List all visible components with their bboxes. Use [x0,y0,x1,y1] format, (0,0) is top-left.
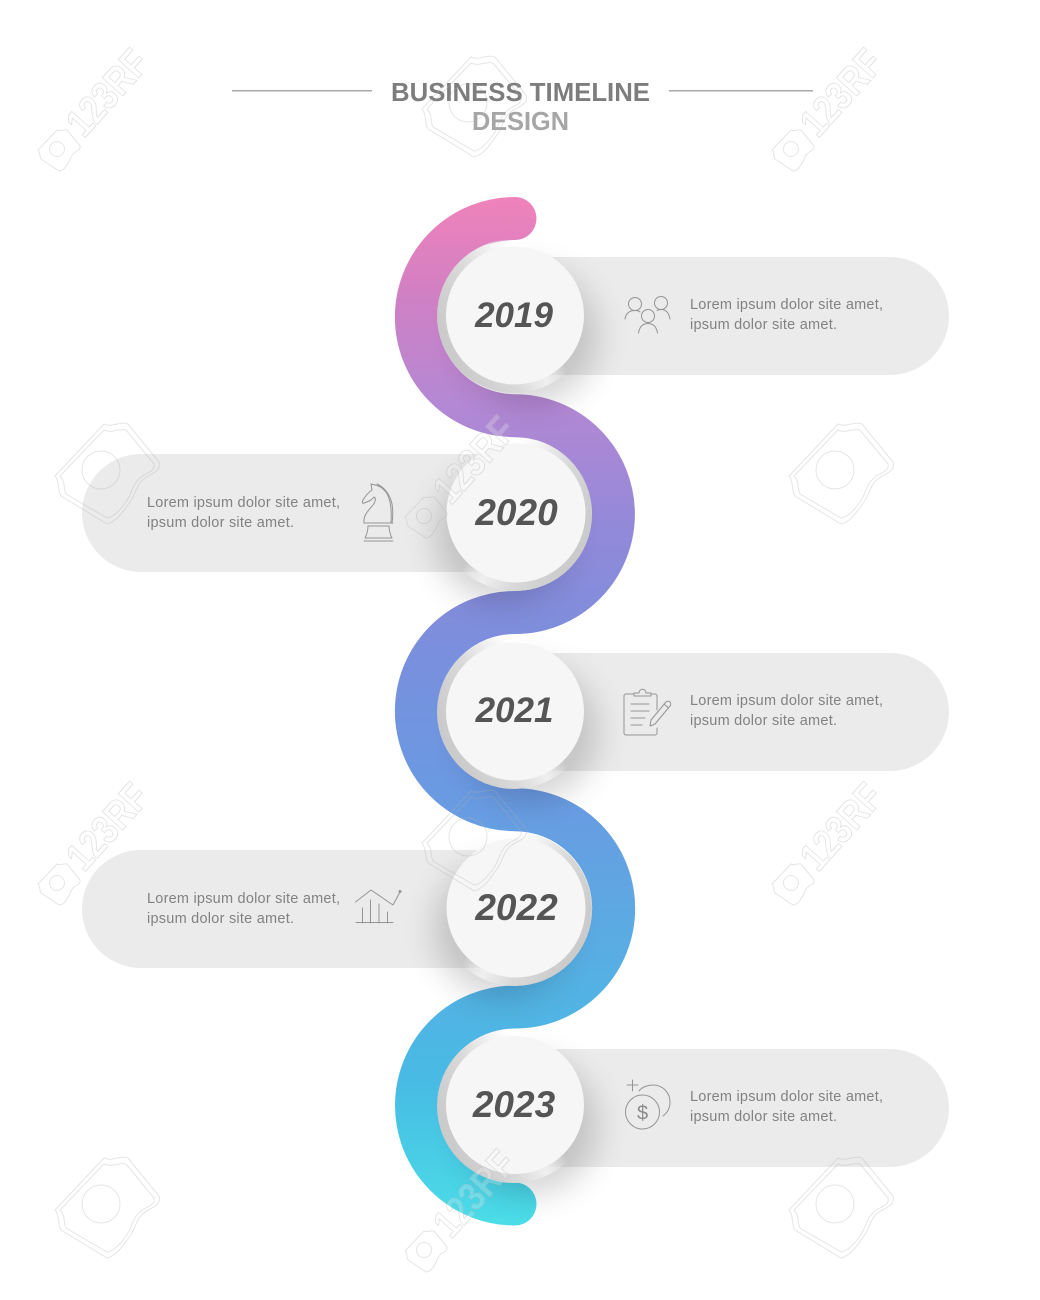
card: 2020 [82,454,500,572]
icon: people [625,296,670,333]
text: 2021: Lorem ipsum dolor site amet, [690,693,883,709]
node: 2023 [437,1029,598,1194]
small stamp lower left [38,864,80,905]
watermark text lower right: 123RF [792,775,892,879]
stamp centre [422,790,527,891]
watermark text bottom: 123RF [425,1142,525,1246]
text: 2023 [690,1089,883,1125]
text: 2022: ipsum dolor site amet. [147,911,294,927]
node: 2023: 2023 [472,1084,556,1125]
text: 2020: ipsum dolor site amet. [147,515,294,531]
text: 2022: Lorem ipsum dolor site amet, [147,891,340,907]
small stamp top left [38,130,80,171]
node: 2020: 2020 [474,492,558,533]
icon: clipboard and pencil [624,689,671,735]
text: 2020: Lorem ipsum dolor site amet, [147,495,340,511]
small stamp bottom [405,1231,447,1272]
stamp right upper [789,423,894,524]
icon: line and bar chart [356,890,401,923]
node: 2019 [437,239,598,404]
card: 2021 [530,653,949,771]
icon: chess knight [362,484,393,541]
text: 2019: Lorem ipsum dolor site amet, [690,297,883,313]
text: 2020 [147,495,340,531]
watermark text top left: 123RF [58,41,158,145]
text: 2023: Lorem ipsum dolor site amet, [690,1089,883,1105]
icon: dollar coins: $ [637,1102,648,1124]
stamp top centre [422,56,527,157]
title rule left [232,90,372,92]
node: 2022: 2022 [474,887,558,928]
watermark: 123RF and stamp marks [38,41,894,1272]
stamp left upper [55,423,160,524]
serpentine gradient ribbon [416,218,614,1204]
title rule right [669,90,813,92]
title second line: DESIGN [472,106,569,136]
text: 2021 [690,693,883,729]
icon: dollar coins [626,1080,670,1129]
small stamp lower right [772,864,814,905]
watermark text middle: 123RF [425,408,525,512]
title [232,77,813,136]
text: 2019 [690,297,883,333]
node: 2022 [434,832,592,997]
small stamp middle [405,497,447,538]
title heading: BUSINESS TIMELINE [391,77,650,107]
stamp bottom right [789,1157,894,1258]
text: 2022 [147,891,340,927]
small stamp top right [772,130,814,171]
card: 2019 [530,257,949,375]
node: 2020 [434,437,592,602]
text: 2023: ipsum dolor site amet. [690,1109,837,1125]
stamp bottom left [55,1157,160,1258]
watermark text top right: 123RF [792,41,892,145]
node: 2021 [437,635,598,800]
card: 2022 [82,850,500,968]
node: 2019: 2019 [474,296,553,335]
card: 2023 [530,1049,949,1167]
watermark text lower left: 123RF [58,775,158,879]
text: 2019: ipsum dolor site amet. [690,317,837,333]
text: 2021: ipsum dolor site amet. [690,713,837,729]
node: 2021: 2021 [475,691,553,730]
